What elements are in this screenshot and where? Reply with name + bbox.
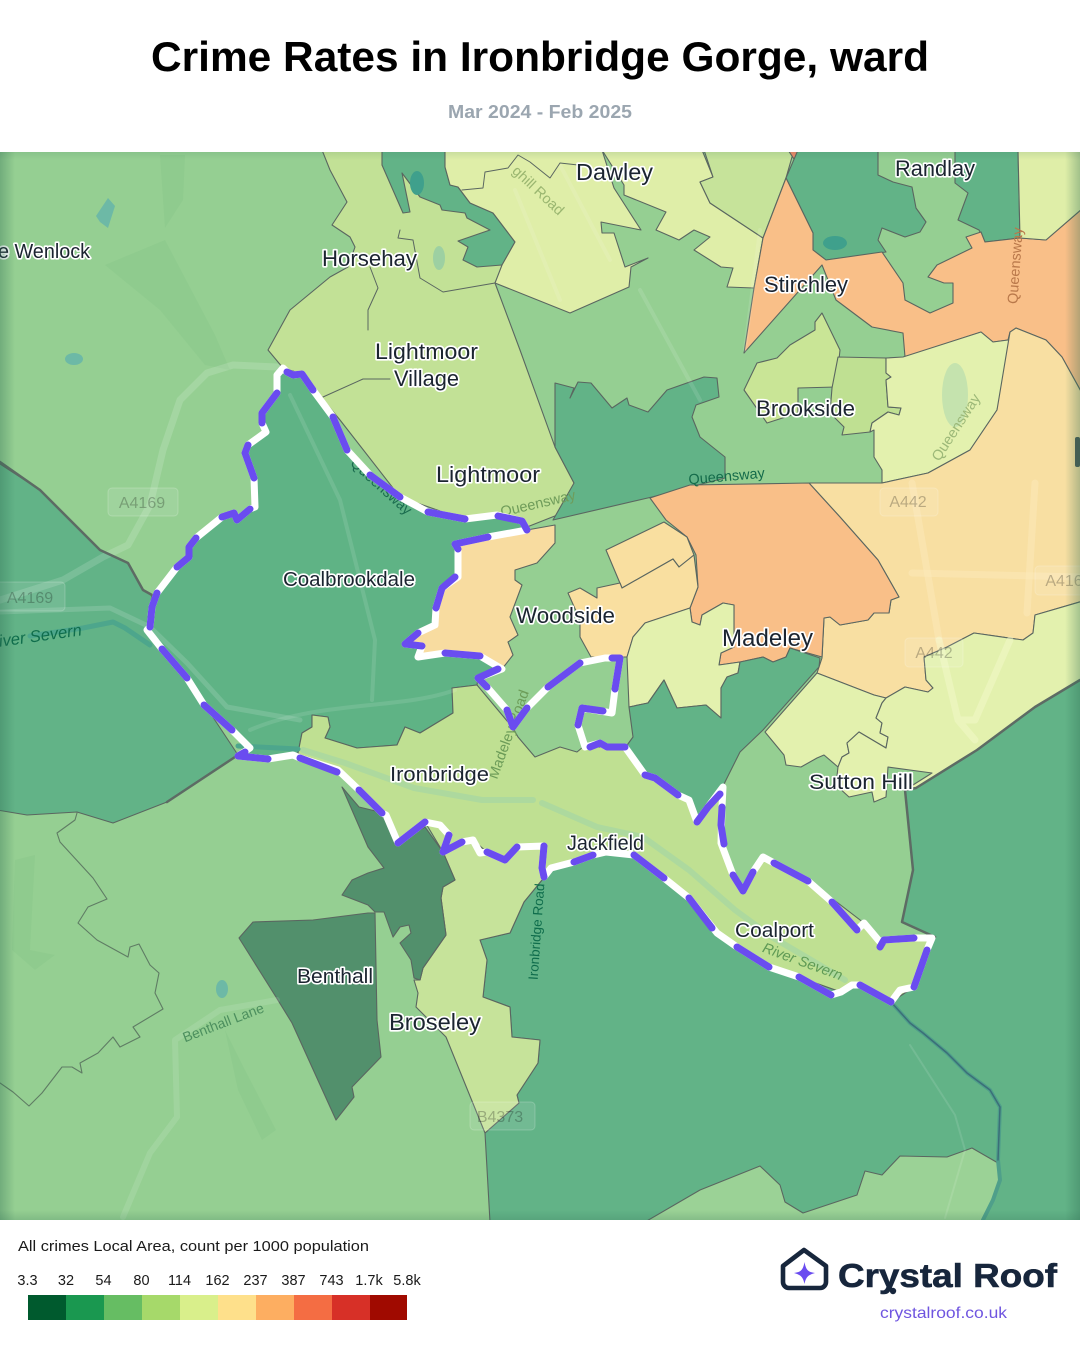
road label: Ironbridge Road: Ironbridge Road [526, 883, 547, 981]
region: Woodside east yellow north [606, 522, 694, 588]
water: Wenlock pond south [65, 353, 83, 365]
region: south-east dark green [480, 678, 1080, 1222]
region: Broseley pale [414, 840, 544, 1133]
shield: A442 south: A442 [915, 645, 953, 662]
legend tick labels: 32 [58, 1273, 74, 1289]
road label: River Severn west: iver Severn [0, 621, 83, 651]
road label: Hill Road: ghill Road [509, 163, 567, 219]
region: west dark green [0, 462, 238, 823]
road name labels [0, 163, 1027, 1045]
legend tick labels: 114 [168, 1273, 191, 1289]
region: Benthall south [239, 913, 381, 1120]
road: Dawley [515, 165, 760, 400]
label: Brookside: Brookside [756, 396, 855, 421]
water: Benthall pond [216, 980, 228, 998]
road: Coalbrookdale valley [250, 395, 455, 730]
district boundary line [0, 462, 1080, 937]
road: Benthall Lane [123, 1000, 277, 1217]
label: Dawley: Dawley [576, 159, 654, 185]
parish boundary lines [0, 813, 163, 1106]
roads: east yellow [912, 483, 1080, 640]
water: Wenlock pond north [96, 198, 115, 228]
base area: light green [0, 152, 1080, 1220]
road: east link [1027, 483, 1035, 613]
road label: Queensway on boundary: Queensway [347, 455, 415, 519]
label: Stirchley: Stirchley [764, 272, 848, 297]
ward boundary purple dashes [150, 372, 927, 1002]
region: Stirchley orange [744, 178, 1080, 395]
legend tick labels: 80 [133, 1273, 150, 1289]
region: Madeley south dark [625, 648, 820, 822]
label: Lightmoor Village [375, 339, 478, 391]
label: Lightmoor: Lightmoor [436, 462, 540, 487]
legend [17, 1238, 421, 1320]
region: north pale green [700, 150, 794, 238]
region: Benthall north [342, 787, 455, 980]
region: red sliver [788, 150, 804, 162]
label: Randlay: Randlay [895, 156, 975, 181]
legend tick labels: 743 [319, 1273, 344, 1289]
shield: A4169 west: A4169 [7, 590, 53, 607]
wordmark: Crystal Roof [838, 1257, 1058, 1294]
road: A416 [912, 573, 1080, 577]
label line: Village: Village [394, 366, 459, 391]
River Severn west [30, 622, 298, 749]
legend tick labels: 1.7k [355, 1273, 383, 1289]
region: north dark green [382, 150, 515, 267]
region: Ironbridge ward area [298, 685, 932, 1002]
region: Randlay dark [786, 150, 926, 260]
roads: west [0, 165, 965, 1218]
icon: house [783, 1250, 826, 1288]
fade: right [1065, 152, 1080, 1220]
label: Sutton Hill: Sutton Hill [809, 771, 913, 794]
region: Brookside pale west [744, 313, 840, 423]
region: Woodside east yellow south [568, 555, 698, 657]
region: Lightmoor and Horsehay [268, 150, 574, 527]
road label: Benthall Lane: Benthall Lane [180, 999, 266, 1045]
region: Randlay east dark [955, 150, 1020, 242]
road label: Madeley Road: Madeley Road [486, 688, 533, 781]
water: Brookside lake [942, 363, 968, 427]
Horsehay internal boundaries [323, 155, 578, 397]
water bodies [65, 171, 968, 998]
label line: Lightmoor: Lightmoor [375, 339, 478, 364]
title [151, 33, 929, 122]
region: east yellow [809, 328, 1080, 698]
road label: Queensway east: Queensway [929, 391, 985, 464]
region: Brookside west dark [553, 377, 725, 520]
shield: A442 north: A442 [889, 494, 927, 511]
water: Horsehay pond [433, 246, 445, 270]
ward boundary white casing [147, 368, 932, 1002]
region: Woodside yellow [405, 525, 555, 669]
choropleth map [0, 152, 1080, 1220]
road label: Queensway west: Queensway [499, 488, 578, 521]
label: Woodside: Woodside [516, 603, 615, 628]
legend tick labels: 54 [95, 1273, 112, 1289]
region: south pale strip [645, 1148, 1000, 1222]
road: A442 south [939, 640, 1010, 740]
legend tick labels [17, 1273, 421, 1289]
region: Sutton Hill north-west [765, 673, 888, 767]
legend tick labels: 5.8k [393, 1273, 421, 1289]
region: Dawley pale [445, 150, 648, 313]
label: Jackfield: Jackfield [567, 832, 644, 855]
terrain shading patches [12, 155, 276, 1140]
patch: south-west woodland [12, 855, 55, 970]
river through gorge [303, 750, 845, 980]
date range subtitle: Mar 2024 - Feb 2025 [448, 101, 632, 122]
patch: west woodland [105, 240, 230, 370]
shield: A442 north [880, 488, 938, 516]
logo: Crystal Roof [783, 1250, 1058, 1322]
River Severn east line [891, 1002, 1000, 1160]
shield: A4169 [108, 488, 178, 516]
roads: south-east pale [939, 640, 1010, 740]
road: south-east [910, 1045, 965, 1218]
water: Horsehay lake [410, 171, 424, 195]
region: north-east pale [1018, 150, 1080, 240]
region: Brookside pale centre [830, 357, 901, 435]
shield: A442 south [905, 638, 963, 667]
shield: B4373 [470, 1102, 535, 1130]
wordmark descender dot [890, 1288, 896, 1294]
fade: top [0, 152, 1080, 160]
road shields [0, 488, 1080, 1130]
shield: A416 [1035, 566, 1080, 595]
terrain, water and road texture [0, 155, 1080, 1220]
region: Brookside pale east [870, 332, 1010, 483]
icon: star [794, 1262, 815, 1284]
map edge fade [0, 152, 1080, 1220]
region: Madeley south pale [627, 603, 740, 718]
label: Ironbridge: Ironbridge [390, 764, 489, 786]
fade: bottom [0, 1210, 1080, 1220]
shield: A4169 west [0, 582, 65, 611]
fade: left [0, 152, 15, 1220]
choropleth regions [0, 150, 1080, 1222]
label: Benthall: Benthall [297, 965, 373, 988]
legend tick labels: 237 [243, 1273, 268, 1289]
ward boundary: Ironbridge Gorge [147, 368, 932, 1002]
road: A442 [912, 483, 939, 640]
website link text: crystalroof.co.uk [880, 1305, 1008, 1322]
label: Coalport: Coalport [735, 920, 814, 942]
road: River road [0, 608, 300, 720]
place name labels [0, 156, 975, 1035]
water: Randlay pool [823, 236, 847, 250]
label: Madeley: Madeley [722, 625, 813, 652]
road: A4169 ring [0, 365, 277, 600]
label: Coalbrookdale: Coalbrookdale [283, 569, 415, 591]
legend title: All crimes Local Area, count per 1000 population [18, 1238, 369, 1255]
legend colour scale [28, 1295, 407, 1320]
road label: River Severn: River Severn [760, 940, 844, 984]
label: Broseley: Broseley [389, 1009, 482, 1035]
footer: legend and logo [17, 1238, 1058, 1322]
legend tick labels: 3.3 [17, 1273, 38, 1289]
patch: south woodland [225, 1030, 276, 1140]
region: Sutton Hill east [836, 601, 1080, 802]
right edge dark fragment [1075, 437, 1080, 467]
region: Madeley orange [650, 483, 899, 665]
region: Coalbrookdale [147, 368, 527, 759]
label: Horsehay: Horsehay [322, 246, 417, 271]
label: Wenlock: e Wenlock [0, 241, 91, 263]
heading: Crime Rates in Ironbridge Gorge, ward [151, 33, 929, 80]
region: north pale [602, 150, 763, 288]
legend tick labels: 162 [205, 1273, 230, 1289]
shield: A4169: A4169 [119, 495, 165, 512]
shield: B4373: B4373 [477, 1109, 523, 1126]
River Severn east glow [891, 1002, 1000, 1220]
road label: Queensway north-east: Queensway [1005, 226, 1027, 304]
legend tick labels: 387 [281, 1273, 306, 1289]
road label: Queensway centre: Queensway [688, 466, 766, 488]
patch: north-west woodland [160, 155, 185, 228]
